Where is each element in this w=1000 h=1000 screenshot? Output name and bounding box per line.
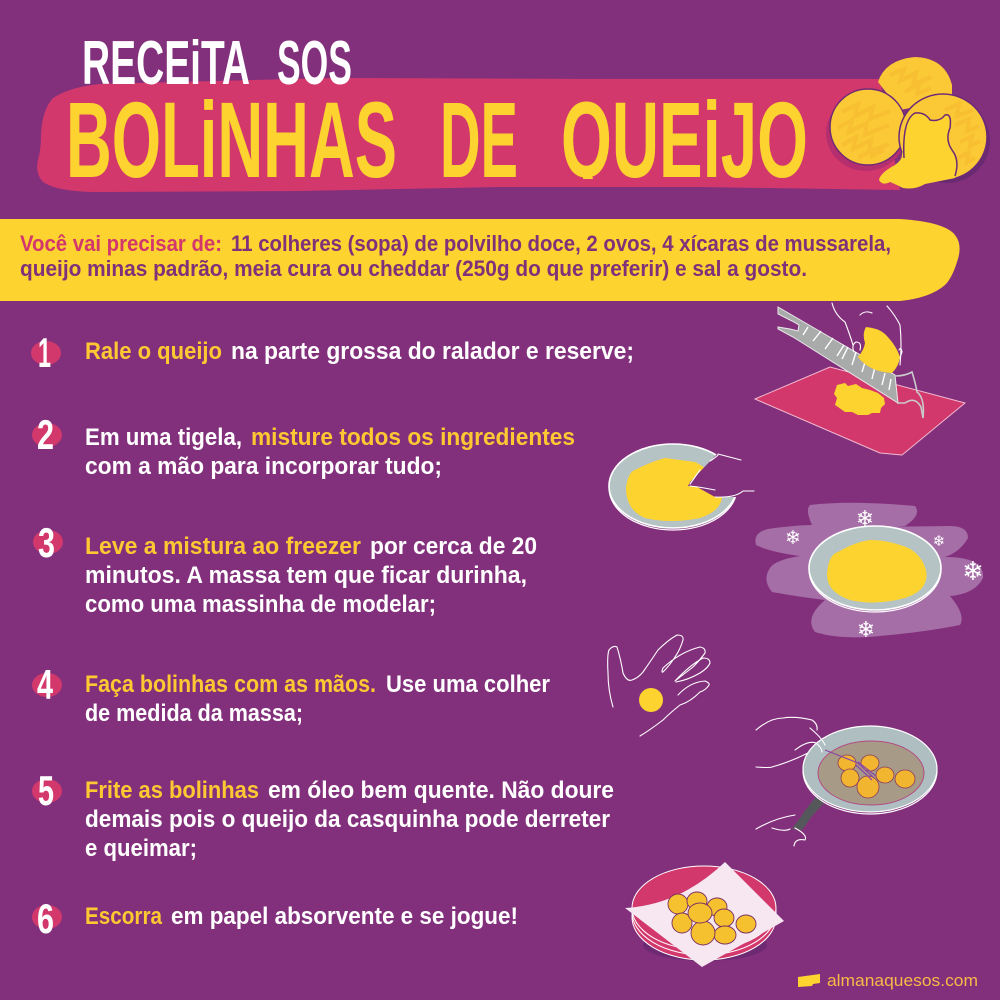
step 5 <box>32 767 614 862</box>
step 3 <box>33 519 537 618</box>
step 2 text: Em uma tigela, <box>85 424 242 451</box>
title banner: pink brush stroke <box>37 78 900 192</box>
ingredients text: 11 colheres (sopa) de polvilho doce, 2 ovos, 4 xícaras de mussarela, <box>231 231 891 256</box>
title: Bolinhas de Queijo: BOLiNHAS <box>66 79 397 200</box>
title: Bolinhas de Queijo: DE <box>440 79 518 200</box>
icon: cheese balls <box>826 57 990 188</box>
step 3 text: por cerca de 20 <box>370 533 537 560</box>
step 6 <box>32 895 518 942</box>
step 5 text: Frite as bolinhas <box>85 777 259 804</box>
step 5 text: e queimar; <box>85 835 197 862</box>
step 1 <box>31 329 634 376</box>
number badge 3: 3 <box>38 519 55 566</box>
step 4 text: Faça bolinhas com as mãos. <box>85 671 376 698</box>
step 6 text: em papel absorvente e se jogue! <box>171 903 518 930</box>
step 4 text: Use uma colher <box>386 671 550 698</box>
icon: snowflake right: ❄ <box>962 557 984 587</box>
icon: snowflake bottom: ❄ <box>857 618 875 643</box>
icon: snowflake right top: ❄ <box>933 532 945 550</box>
number badge 5: 5 <box>38 767 54 814</box>
illustration: hand with cheese ball <box>608 635 710 736</box>
step 5 text: em óleo bem quente. Não doure <box>268 777 614 804</box>
ingredients text: Você vai precisar de: <box>20 231 222 256</box>
step 4 <box>32 661 550 727</box>
icon: snowflake top: ❄ <box>856 507 874 532</box>
step 4 text: de medida da massa; <box>85 700 303 727</box>
step 3 text: como uma massinha de modelar; <box>85 591 436 618</box>
step 2 text <box>85 424 575 480</box>
step 3 text <box>85 533 537 618</box>
step 6 text: Escorra <box>85 903 163 930</box>
illustration: plate with fried bolinhas on paper towel <box>625 862 784 967</box>
step 5 text: demais pois o queijo da casquinha pode derreter <box>85 806 610 833</box>
step 3 text: minutos. A massa tem que ficar durinha, <box>85 562 527 589</box>
title: Receita SOS: SOS <box>277 29 352 98</box>
number badge 6: 6 <box>37 895 54 942</box>
step 2 <box>32 411 575 480</box>
step 5 text <box>85 777 614 862</box>
ingredients text: queijo minas padrão, meia cura ou cheddar (250g do que preferir) e sal a gosto. <box>20 256 807 281</box>
illustration: frying pan with bolinhas <box>756 717 937 846</box>
illustration: grater on cutting board <box>755 303 965 455</box>
icon: snowflake left: ❄ <box>785 527 801 549</box>
panel: ingredients band <box>0 219 960 301</box>
step 1 text: Rale o queijo <box>85 338 222 365</box>
step 4 text <box>85 671 550 727</box>
number badge 2: 2 <box>37 411 54 458</box>
illustration: freezing bowl with snowflakes <box>755 503 984 643</box>
website: almanaquesos.com <box>827 971 978 990</box>
illustration: mixing bowl with hand <box>609 444 754 530</box>
title: Receita SOS: RECEiTA <box>82 29 250 98</box>
title: Bolinhas de Queijo <box>70 99 806 179</box>
ingredients text <box>20 231 891 281</box>
icon: speech flag <box>798 974 820 987</box>
title: Bolinhas de Queijo: QUEiJO <box>561 79 808 200</box>
step 2 text: misture todos os ingredientes <box>251 424 575 451</box>
step 2 text: com a mão para incorporar tudo; <box>85 453 442 480</box>
number badge 4: 4 <box>37 661 53 708</box>
footer: site credit <box>798 971 978 990</box>
number badge 1: 1 <box>38 329 51 376</box>
step 3 text: Leve a mistura ao freezer <box>85 533 361 560</box>
step 1 text: na parte grossa do ralador e reserve; <box>231 338 634 365</box>
